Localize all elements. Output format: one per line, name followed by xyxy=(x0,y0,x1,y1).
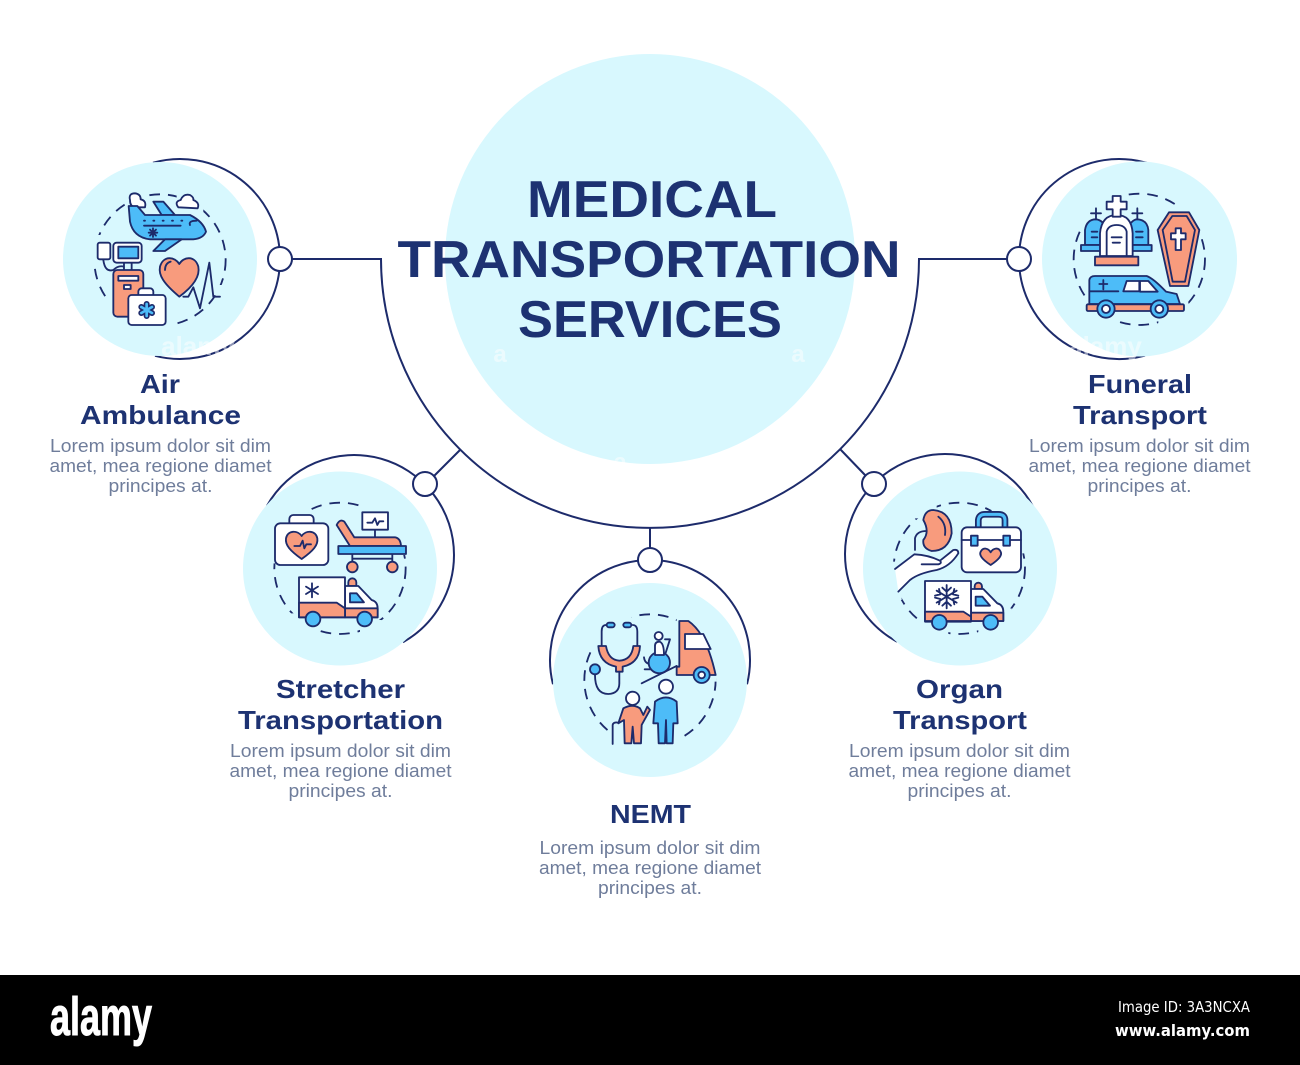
funeral heading: Funeral xyxy=(1088,369,1192,399)
funeral watermark: alamy xyxy=(1068,331,1142,361)
nemt circle xyxy=(553,583,747,777)
stretcher text xyxy=(230,741,452,801)
funeral text: Lorem ipsum dolor sit dim xyxy=(1029,436,1250,456)
stretcher text: Lorem ipsum dolor sit dim xyxy=(230,741,451,761)
nemt ring xyxy=(550,560,750,684)
icon: air ambulance xyxy=(85,190,230,328)
central circle watermark xyxy=(493,341,805,476)
stretcher node xyxy=(413,472,437,496)
air ambulance node xyxy=(268,247,292,271)
air ambulance heading: Air xyxy=(140,369,180,399)
nemt text: principes at. xyxy=(598,878,702,898)
funeral text: principes at. xyxy=(1088,476,1192,496)
organ heading xyxy=(893,674,1027,735)
funeral heading: Transport xyxy=(1073,400,1207,430)
organ circle xyxy=(863,472,1057,666)
funeral node xyxy=(1007,247,1031,271)
air ambulance ring xyxy=(153,159,280,359)
panel: air ambulance xyxy=(50,159,292,496)
funeral heading xyxy=(1073,369,1207,430)
footer image id: Image ID: 3A3NCXA xyxy=(1118,998,1251,1016)
stretcher text: amet, mea regione diamet xyxy=(230,761,452,781)
panel: nemt xyxy=(539,548,761,898)
nemt text: Lorem ipsum dolor sit dim xyxy=(540,838,760,858)
central circle xyxy=(445,54,855,464)
organ heading: Organ xyxy=(916,674,1003,704)
footer bar xyxy=(0,975,1300,1065)
air ambulance heading xyxy=(80,369,241,430)
footer logo: alamy xyxy=(50,987,152,1047)
stretcher circle xyxy=(243,472,437,666)
organ text: amet, mea regione diamet xyxy=(848,761,1070,781)
icon: funeral transport xyxy=(1073,192,1210,328)
stretcher heading: Transportation xyxy=(238,705,443,735)
organ heading: Transport xyxy=(893,705,1027,735)
panel: organ transport xyxy=(845,454,1070,801)
central circle watermark: a xyxy=(493,341,507,368)
air ambulance heading: Ambulance xyxy=(80,400,241,430)
title: TRANSPORTATION xyxy=(398,231,900,289)
organ text: principes at. xyxy=(908,781,1012,801)
funeral circle xyxy=(1042,162,1237,356)
stretcher ring xyxy=(267,455,454,642)
funeral text: amet, mea regione diamet xyxy=(1028,456,1250,476)
air ambulance circle xyxy=(63,162,257,356)
footer url: www.alamy.com xyxy=(1115,1021,1250,1040)
central circle watermark: a xyxy=(613,449,627,476)
organ ring xyxy=(845,454,1033,642)
organ text xyxy=(848,741,1070,801)
nemt node xyxy=(638,548,662,572)
nemt text xyxy=(539,838,761,898)
funeral text xyxy=(1028,436,1250,496)
air ambulance text xyxy=(50,436,272,496)
air ambulance text: amet, mea regione diamet xyxy=(50,456,272,476)
connector arc xyxy=(292,259,1008,548)
stretcher heading: Stretcher xyxy=(276,674,405,704)
stretcher heading xyxy=(238,674,443,735)
title: MEDICAL xyxy=(527,171,777,229)
icon: stretcher transportation xyxy=(268,500,408,637)
central circle watermark: a xyxy=(791,341,805,368)
title xyxy=(398,171,900,349)
panel: funeral transport xyxy=(1007,159,1250,496)
air ambulance text: Lorem ipsum dolor sit dim xyxy=(50,436,271,456)
air ambulance text: principes at. xyxy=(108,476,212,496)
nemt heading: NEMT xyxy=(610,799,691,829)
panel: stretcher transportation xyxy=(230,455,454,801)
title: SERVICES xyxy=(518,291,782,349)
organ node xyxy=(862,472,886,496)
stretcher text: principes at. xyxy=(288,781,392,801)
nemt text: amet, mea regione diamet xyxy=(539,858,761,878)
air ambulance watermark: alamy xyxy=(161,331,235,361)
icon: nemt xyxy=(584,612,717,750)
funeral ring xyxy=(1019,159,1147,359)
icon: organ transport xyxy=(888,498,1028,638)
organ text: Lorem ipsum dolor sit dim xyxy=(849,741,1070,761)
